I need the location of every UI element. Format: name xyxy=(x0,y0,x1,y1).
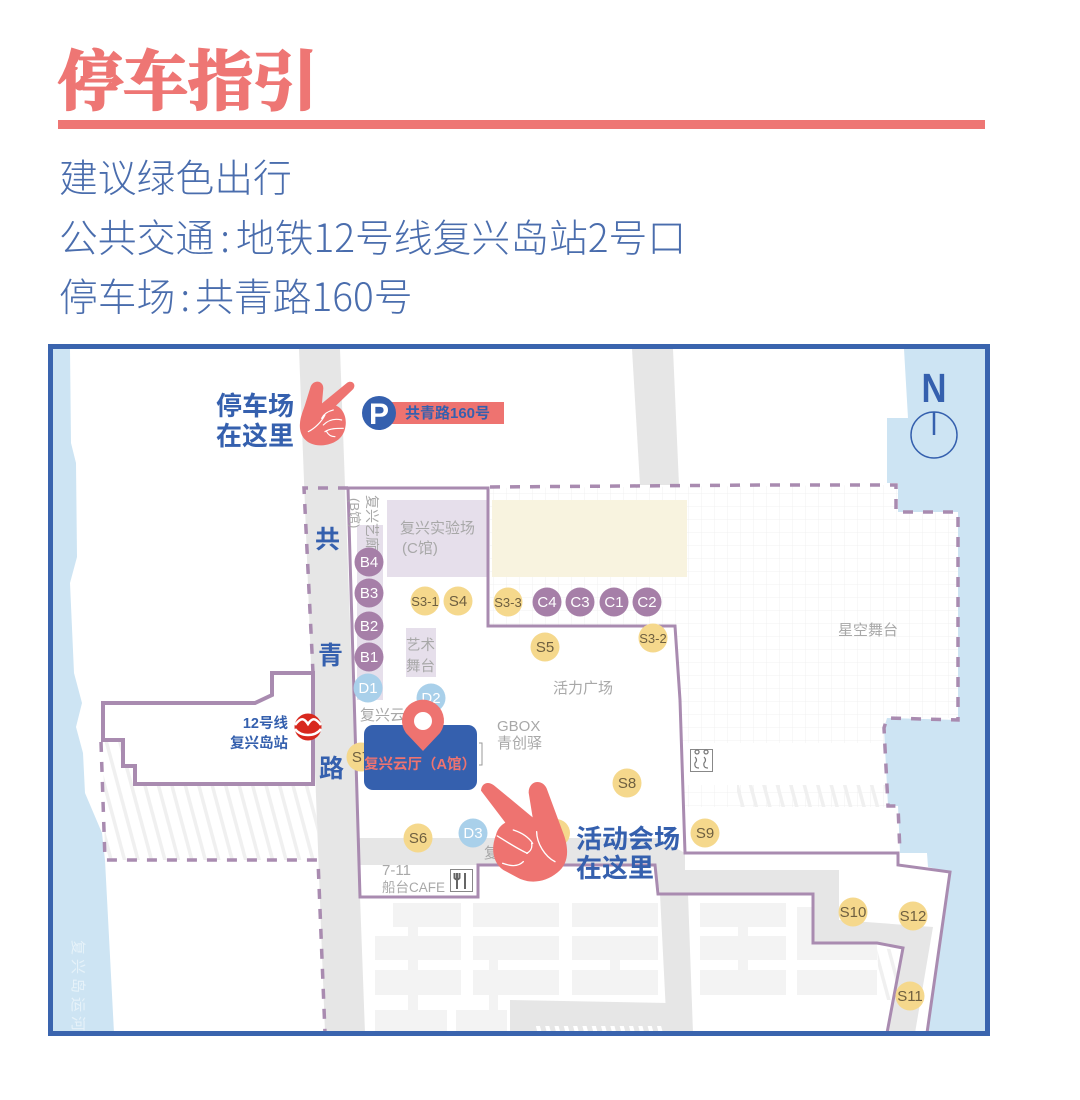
booth markers: D1 xyxy=(358,680,378,697)
text block: travel advice: 停车场:共青路160号 xyxy=(59,267,413,323)
map labels grey xyxy=(69,495,898,1035)
main venue: Fuxing Cloud Hall A xyxy=(364,725,477,790)
booth markers: D2 xyxy=(421,690,441,707)
map labels grey: 复兴实验场 xyxy=(400,519,475,537)
metro station label: 12号线 xyxy=(243,714,288,732)
callout: parking here: 停车场 xyxy=(216,391,294,421)
booth markers: S3-3 xyxy=(494,595,522,610)
booth markers: S4 xyxy=(449,593,467,610)
booth markers: S12 xyxy=(900,908,926,925)
parking blocks xyxy=(375,903,877,1033)
grid plaza xyxy=(490,485,958,807)
map labels grey: GBOX xyxy=(497,718,540,735)
north compass: N xyxy=(922,365,946,411)
booth markers: S3-1 xyxy=(411,594,439,609)
text block: travel advice: 建议绿色出行 xyxy=(59,148,292,204)
icon: metro logo xyxy=(294,714,322,740)
north compass xyxy=(911,365,957,458)
bracket line xyxy=(479,743,482,765)
booth markers: B2 xyxy=(360,618,378,635)
map labels grey: 7-11 xyxy=(382,862,411,879)
icon: large victory hand xyxy=(481,782,567,882)
venue boundary dashed xyxy=(101,485,958,1033)
booth markers: S9 xyxy=(696,825,714,842)
booth markers: S11 xyxy=(897,988,923,1005)
title underline xyxy=(58,120,985,129)
map labels grey: 复兴艺廊 xyxy=(364,495,380,551)
map labels grey: 星空舞台 xyxy=(838,622,898,639)
booth markers: B4 xyxy=(360,554,378,571)
booth markers: B1 xyxy=(360,649,378,666)
main venue: Fuxing Cloud Hall A: 复兴云厅（A馆） xyxy=(364,755,476,773)
road name xyxy=(315,526,344,783)
metro station label: 复兴岛站 xyxy=(230,734,288,752)
panel: site map xyxy=(50,346,988,1035)
booth markers: S7 xyxy=(352,749,370,766)
booth markers: C2 xyxy=(637,594,657,611)
parking address tag: P xyxy=(369,398,389,431)
booth markers: C4 xyxy=(537,594,557,611)
booth markers: S8 xyxy=(618,775,636,792)
booth markers: S10 xyxy=(840,904,866,921)
icon: toilet xyxy=(690,750,712,772)
map labels grey: 舞台 xyxy=(406,658,435,675)
map labels grey: (B馆) xyxy=(347,498,362,528)
map labels grey: 船台CAFE xyxy=(382,880,445,895)
icon: small victory hand xyxy=(300,382,354,445)
map labels grey: (C馆) xyxy=(402,540,438,557)
booth markers xyxy=(346,548,928,1010)
map labels grey: 复兴岛运河 xyxy=(69,940,87,1035)
booth markers: C1 xyxy=(604,594,624,611)
booth markers: D3 xyxy=(463,825,483,842)
metro station label xyxy=(230,714,288,752)
booth markers: B3 xyxy=(360,585,378,602)
hatched areas xyxy=(103,742,903,1033)
road name: 青 xyxy=(318,642,343,670)
callout: venue here: 在这里 xyxy=(576,853,654,883)
text block: travel advice xyxy=(59,148,686,323)
parking address tag xyxy=(362,396,504,431)
map frame xyxy=(50,346,988,1034)
map labels grey: 艺术 xyxy=(406,637,435,654)
venue colour blocks xyxy=(357,500,687,700)
road name: 路 xyxy=(319,755,344,783)
booth markers: C3 xyxy=(570,594,590,611)
icon: location pin xyxy=(402,700,444,751)
callout: parking here xyxy=(216,391,294,451)
callout: venue here xyxy=(576,824,680,883)
booth markers: S6 xyxy=(409,830,427,847)
title: 停车指引 xyxy=(58,29,318,123)
water: left canal xyxy=(53,349,114,1033)
booth markers: S5 xyxy=(536,639,554,656)
map labels grey: 复 xyxy=(484,844,499,862)
road name: 共 xyxy=(315,526,340,554)
map labels grey: 复兴云 xyxy=(360,706,405,724)
map labels grey: 青创驿 xyxy=(497,735,542,752)
parking address tag: 共青路160号 xyxy=(405,404,490,422)
text block: travel advice: 公共交通:地铁12号线复兴岛站2号口 xyxy=(59,208,686,264)
booth markers: S3-2 xyxy=(639,631,667,646)
water: right river xyxy=(884,349,985,1033)
venue boundary solid xyxy=(103,488,950,1033)
callout: parking here: 在这里 xyxy=(216,421,294,451)
icon: restaurant xyxy=(450,870,472,892)
map labels grey: 活力广场 xyxy=(553,680,613,697)
roads xyxy=(299,349,933,1033)
callout: venue here: 活动会场 xyxy=(576,824,680,854)
